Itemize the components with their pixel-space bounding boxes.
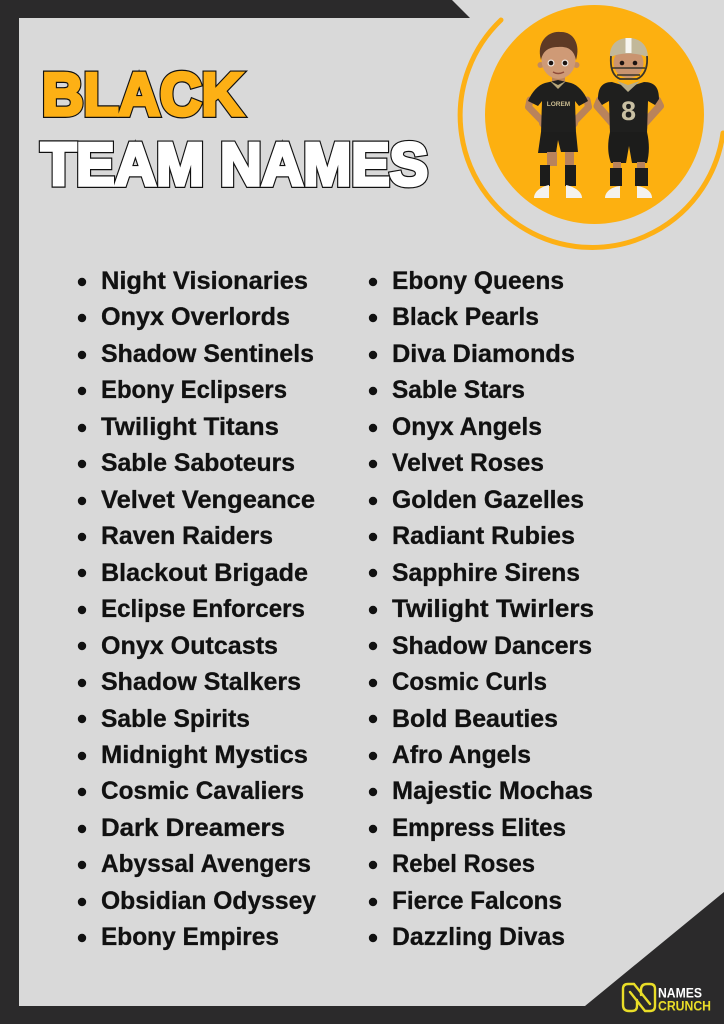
names: Twilight Titans bbox=[101, 413, 279, 441]
illustration: two players bbox=[528, 32, 660, 198]
title line: TEAM NAMES: TEAM NAMES bbox=[41, 131, 428, 198]
names: Dazzling Divas bbox=[392, 923, 565, 951]
logo mark bbox=[623, 984, 655, 1011]
names: Ebony Empires bbox=[101, 923, 279, 951]
names: Sable Spirits bbox=[101, 705, 250, 733]
logo word: NAMES: NAMES bbox=[658, 986, 702, 1000]
logo word: CRUNCH: CRUNCH bbox=[658, 998, 711, 1014]
list column 2 bbox=[369, 267, 594, 951]
names: Eclipse Enforcers bbox=[101, 595, 305, 623]
names: Twilight Twirlers bbox=[392, 595, 594, 623]
names: Majestic Mochas bbox=[392, 777, 593, 805]
names: Rebel Roses bbox=[392, 850, 535, 878]
names: Ebony Queens bbox=[392, 267, 564, 295]
names: Velvet Vengeance bbox=[101, 486, 315, 514]
names: Shadow Sentinels bbox=[101, 340, 314, 368]
bullets bbox=[369, 278, 377, 942]
names: Cosmic Curls bbox=[392, 668, 547, 696]
list column 1 bbox=[78, 267, 316, 951]
names: Midnight Mystics bbox=[101, 741, 308, 769]
title line: TEAM NAMES: TEAM NAMES bbox=[41, 131, 428, 198]
names: Dark Dreamers bbox=[101, 814, 285, 842]
names: Shadow Dancers bbox=[392, 632, 592, 660]
names: Obsidian Odyssey bbox=[101, 887, 316, 915]
names bbox=[392, 267, 594, 951]
names: Afro Angels bbox=[392, 741, 531, 769]
names: Sapphire Sirens bbox=[392, 559, 580, 587]
names: Abyssal Avengers bbox=[101, 850, 311, 878]
names bbox=[101, 267, 316, 951]
names: Radiant Rubies bbox=[392, 522, 575, 550]
player in american football kit: 8 bbox=[621, 96, 636, 126]
names: Ebony Eclipsers bbox=[101, 376, 287, 404]
decorative ring arc bbox=[460, 20, 723, 247]
bullets bbox=[78, 278, 86, 942]
logo: Names Crunch bbox=[623, 984, 711, 1014]
names: Sable Saboteurs bbox=[101, 449, 295, 477]
player in soccer kit: LOREM bbox=[547, 101, 570, 108]
title line: BLACK: BLACK bbox=[42, 61, 243, 128]
names: Fierce Falcons bbox=[392, 887, 562, 915]
names: Cosmic Cavaliers bbox=[101, 777, 304, 805]
player in soccer kit bbox=[528, 32, 588, 198]
names: Sable Stars bbox=[392, 376, 525, 404]
yellow circle bbox=[485, 5, 704, 224]
names: Onyx Outcasts bbox=[101, 632, 278, 660]
names: Raven Raiders bbox=[101, 522, 273, 550]
names: Night Visionaries bbox=[101, 267, 308, 295]
names: Onyx Angels bbox=[392, 413, 542, 441]
names: Bold Beauties bbox=[392, 705, 558, 733]
names: Onyx Overlords bbox=[101, 303, 290, 331]
names: Empress Elites bbox=[392, 814, 566, 842]
names: Velvet Roses bbox=[392, 449, 544, 477]
names: Shadow Stalkers bbox=[101, 668, 301, 696]
names: Blackout Brigade bbox=[101, 559, 308, 587]
names: Black Pearls bbox=[392, 303, 539, 331]
player in american football kit bbox=[598, 38, 660, 198]
title line: BLACK: BLACK bbox=[42, 61, 243, 128]
names: Diva Diamonds bbox=[392, 340, 575, 368]
names: Golden Gazelles bbox=[392, 486, 584, 514]
title bbox=[41, 61, 428, 198]
